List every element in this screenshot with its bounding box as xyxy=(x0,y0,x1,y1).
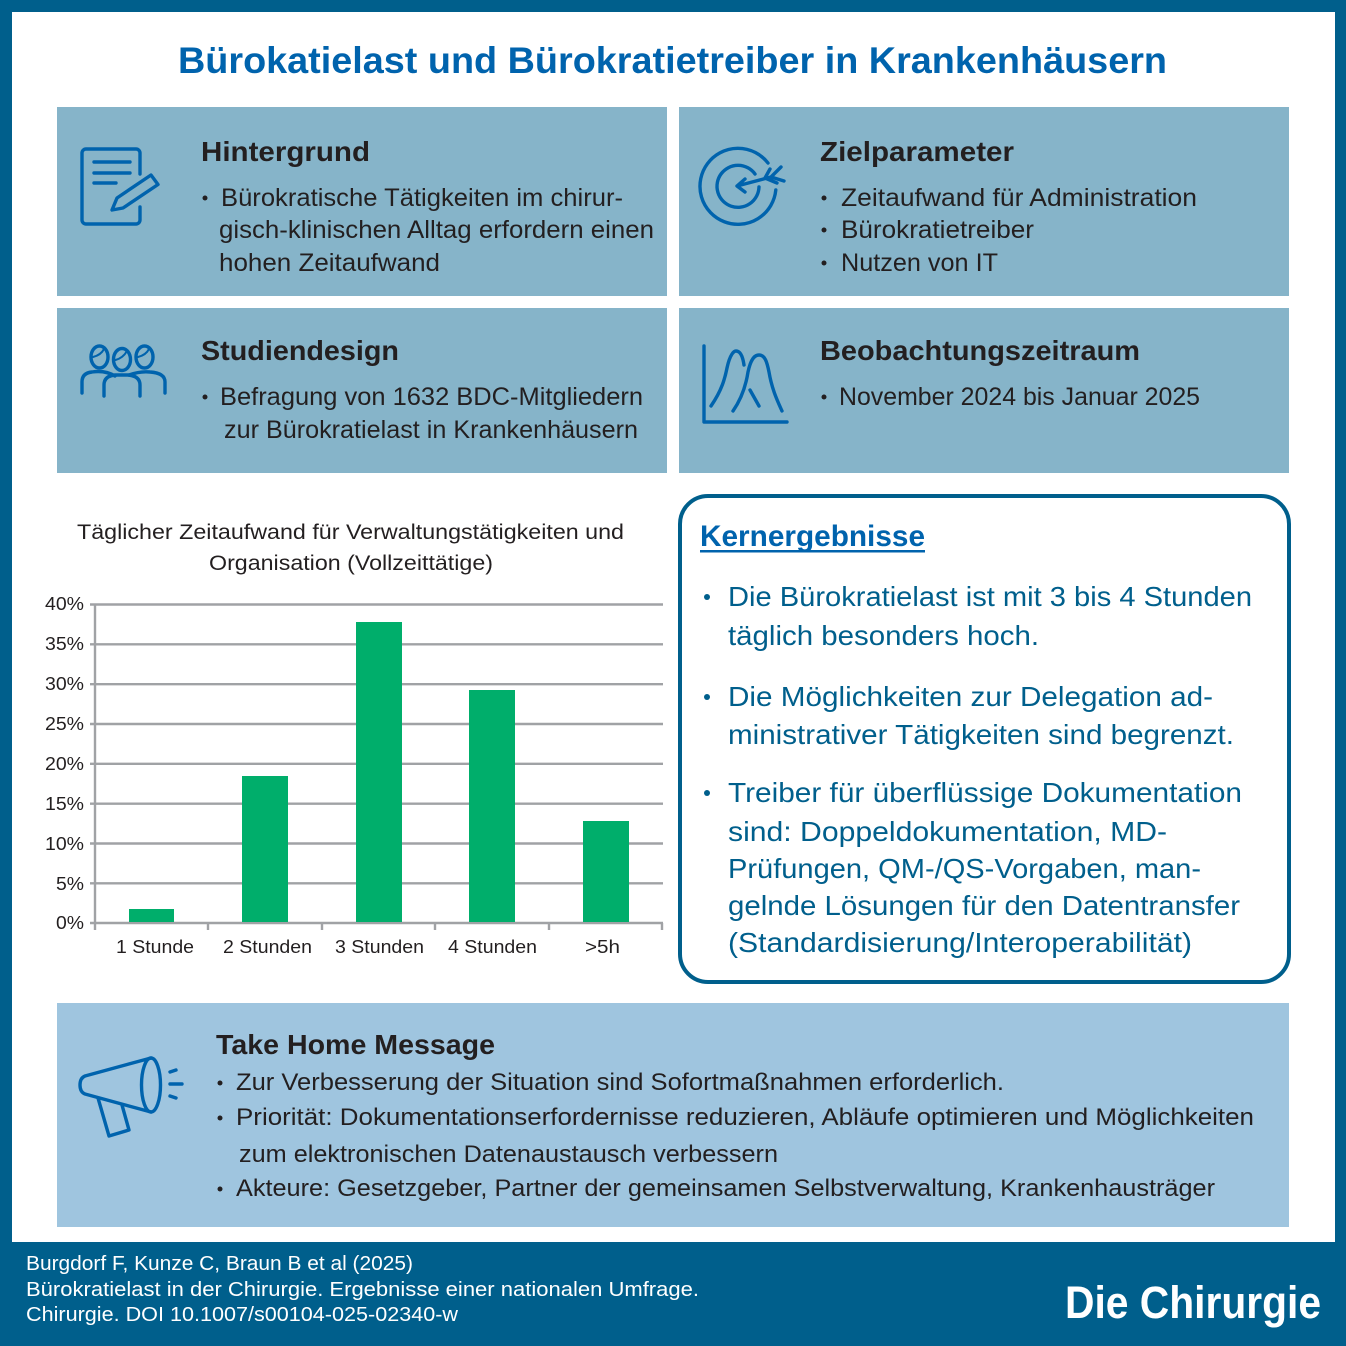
text: Studiendesign bullet: Befragung von 1632 BDC-Mitgliedern xyxy=(220,383,643,411)
x axis labels: 1 Stunde xyxy=(116,937,194,957)
text: take home bullets: zum elektronischen Datenaustausch verbessern xyxy=(239,1141,778,1168)
text: Hintergrund bullet: gisch-klinischen Alltag erfordern einen xyxy=(219,216,654,244)
y axis labels: 10% xyxy=(45,834,84,854)
text: Zielparameter bullets: Bürokratietreiber xyxy=(841,216,1034,244)
finding 3: Prüfungen, QM-/QS-Vorgaben, man- xyxy=(728,853,1201,884)
y axis labels: 20% xyxy=(45,754,84,774)
text: Studiendesign bullet: zur Bürokratielast in Krankenhäusern xyxy=(224,416,638,444)
x axis labels: 2 Stunden xyxy=(223,937,312,957)
text: Hintergrund bullet xyxy=(202,184,654,277)
heading: Zielparameter: Zielparameter xyxy=(820,136,1014,167)
text: Zielparameter bullets: Zeitaufwand für Administration xyxy=(841,184,1197,212)
icon: group of people xyxy=(82,346,165,396)
text: Zielparameter bullets xyxy=(822,184,1197,277)
text: Studiendesign bullet xyxy=(202,383,643,444)
y axis labels: 30% xyxy=(45,674,84,694)
footer citation xyxy=(26,1253,699,1326)
y axis labels: 5% xyxy=(56,874,84,894)
text: Zielparameter bullets: Nutzen von IT xyxy=(841,249,998,277)
finding 3: Treiber für überflüssige Dokumentation xyxy=(728,777,1242,808)
bar chart xyxy=(45,521,663,957)
panel: Take Home Message xyxy=(57,1003,1289,1227)
text: Hintergrund bullet: Bürokratische Tätigkeiten im chirur- xyxy=(221,184,623,212)
chart title xyxy=(77,521,624,575)
finding 3: (Standardisierung/Interoperabilität) xyxy=(728,927,1192,958)
x axis labels: 4 Stunden xyxy=(448,937,537,957)
heading: Take Home Message: Take Home Message xyxy=(216,1029,495,1060)
text: take home bullets xyxy=(218,1069,1254,1202)
x axis labels: 3 Stunden xyxy=(335,937,424,957)
finding 2: ministrativer Tätigkeiten sind begrenzt. xyxy=(728,719,1234,750)
icon: target with arrow xyxy=(700,148,784,224)
finding 3: gelnde Lösungen für den Datentransfer xyxy=(728,890,1240,921)
y axis labels: 25% xyxy=(45,714,84,734)
text: take home bullets: Zur Verbesserung der Situation sind Sofortmaßnahmen erforderlich. xyxy=(236,1069,1004,1096)
y axis labels: 40% xyxy=(45,594,84,614)
y axis labels: 35% xyxy=(45,634,84,654)
heading: Kernergebnisse: Kernergebnisse xyxy=(700,520,925,553)
panel: Kernergebnisse xyxy=(680,496,1289,982)
y axis labels: 15% xyxy=(45,794,84,814)
x axis labels xyxy=(116,937,620,957)
icon: document with pencil xyxy=(82,149,158,224)
bars xyxy=(129,622,629,922)
heading: Studiendesign: Studiendesign xyxy=(201,335,399,366)
chart title: Täglicher Zeitaufwand für Verwaltungstätigkeiten und xyxy=(77,521,624,544)
footer citation: Chirurgie. DOI 10.1007/s00104-025-02340-w xyxy=(26,1304,459,1326)
heading: Beobachtungszeitraum: Beobachtungszeitraum xyxy=(820,335,1140,366)
y axis labels xyxy=(45,594,84,933)
finding 3 xyxy=(704,777,1242,958)
finding 2 xyxy=(704,681,1234,750)
text: Hintergrund bullet: hohen Zeitaufwand xyxy=(219,249,440,277)
heading: Hintergrund: Hintergrund xyxy=(201,136,370,167)
panel: Hintergrund xyxy=(57,107,667,296)
finding 2: Die Möglichkeiten zur Delegation ad- xyxy=(728,681,1213,712)
x axis labels: >5h xyxy=(585,937,620,957)
footer citation: Bürokratielast in der Chirurgie. Ergebnisse einer nationalen Umfrage. xyxy=(26,1279,699,1301)
footer citation: Burgdorf F, Kunze C, Braun B et al (2025) xyxy=(26,1253,413,1275)
finding 1: Die Bürokratielast ist mit 3 bis 4 Stunden xyxy=(728,581,1252,612)
title: Bürokatielast und Bürokratietreiber in Krankenhäusern xyxy=(178,40,1167,81)
finding 1: täglich besonders hoch. xyxy=(728,620,1039,651)
text: Beobachtungszeitraum bullet: November 2024 bis Januar 2025 xyxy=(839,383,1200,411)
panel: Beobachtungszeitraum xyxy=(679,308,1289,473)
chart title: Organisation (Vollzeittätige) xyxy=(209,552,493,575)
finding 1 xyxy=(704,581,1252,651)
text: take home bullets: Priorität: Dokumentationserfordernisse reduzieren, Abläufe optimieren und Möglichkeiten xyxy=(236,1104,1254,1131)
icon: megaphone xyxy=(80,1058,182,1136)
y axis labels: 0% xyxy=(56,913,84,933)
finding 3: sind: Doppeldokumentation, MD- xyxy=(728,816,1167,847)
panel: Studiendesign xyxy=(57,308,667,473)
icon: distribution curves xyxy=(704,346,787,422)
text: take home bullets: Akteure: Gesetzgeber, Partner der gemeinsamen Selbstverwaltung, Krankenhausträger xyxy=(236,1175,1215,1202)
journal name: Die Chirurgie xyxy=(1065,1277,1321,1328)
panel: Zielparameter xyxy=(679,107,1289,296)
